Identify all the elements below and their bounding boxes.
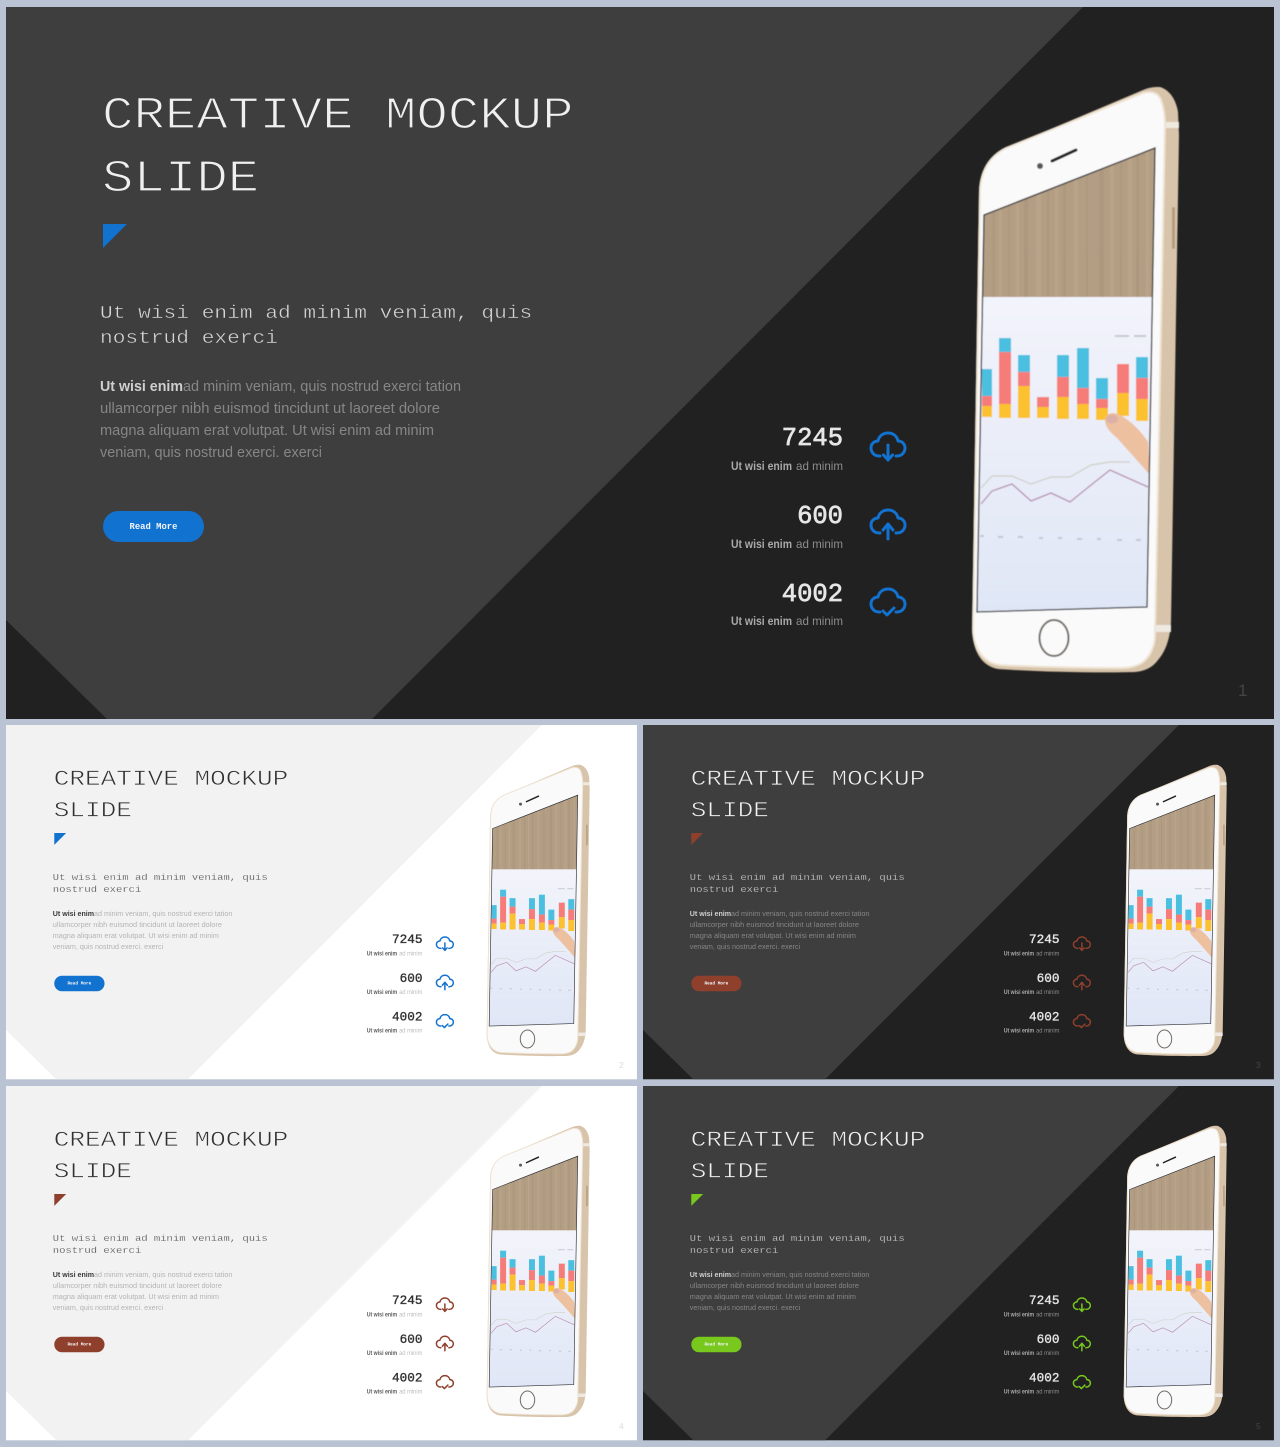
stat: 7245 xyxy=(1004,932,1060,957)
stat: 7245 xyxy=(731,424,843,473)
phone mockup xyxy=(970,87,1179,672)
title: SLIDE xyxy=(691,799,769,824)
icon: cloud check xyxy=(436,1376,453,1389)
panel: dark slide, green accent xyxy=(643,1086,1274,1440)
subheading xyxy=(53,1233,268,1256)
stat: 600 xyxy=(367,971,423,996)
body text xyxy=(53,909,232,951)
title xyxy=(102,90,574,205)
body text: veniam, quis nostrud exerci. exerci xyxy=(690,1303,801,1312)
stat: 7245: Ut wisi enim xyxy=(1004,951,1034,957)
body text: ad minim veniam, quis nostrud exerci tation xyxy=(94,1270,232,1279)
stat: 600: ad minim xyxy=(399,1351,423,1357)
body text xyxy=(690,909,869,951)
stat: 4002: 4002 xyxy=(392,1010,422,1025)
icon: cloud download xyxy=(436,1298,453,1311)
title: CREATIVE MOCKUP xyxy=(54,768,288,793)
stat: 600: 600 xyxy=(1037,1332,1059,1347)
page number: 2 xyxy=(619,1060,624,1070)
icon: cloud download xyxy=(871,433,905,460)
read more button xyxy=(691,1337,742,1352)
subheading: Ut wisi enim ad minim veniam, quis xyxy=(690,872,905,883)
stat: 600: Ut wisi enim xyxy=(1004,1351,1034,1357)
page number: 4 xyxy=(619,1421,624,1431)
title: SLIDE xyxy=(54,799,132,824)
stat: 4002: ad minim xyxy=(796,614,843,628)
stat: 7245 xyxy=(1004,1293,1060,1318)
icon: cloud upload xyxy=(436,975,453,990)
stat: 600: 600 xyxy=(400,971,422,986)
subheading: Ut wisi enim ad minim veniam, quis xyxy=(100,302,532,324)
stat: 4002: ad minim xyxy=(399,1029,423,1035)
panel: light slide, brown accent xyxy=(6,1086,637,1440)
stat: 4002: Ut wisi enim xyxy=(367,1029,397,1035)
title xyxy=(54,768,288,824)
body text: magna aliquam erat volutpat. Ut wisi enim ad minim xyxy=(690,1292,856,1301)
title: CREATIVE MOCKUP xyxy=(691,1129,925,1154)
stat: 7245 xyxy=(367,932,423,957)
stat: 4002: ad minim xyxy=(1036,1029,1060,1035)
body text: ullamcorper nibh euismod tincidunt ut laoreet dolore xyxy=(53,1281,222,1290)
panel: light slide, blue accent xyxy=(6,725,637,1079)
stat: 4002: 4002 xyxy=(1029,1010,1059,1025)
title xyxy=(691,768,925,824)
body text xyxy=(100,379,461,461)
panel: large dark slide, blue accent xyxy=(6,7,1274,719)
read more button xyxy=(54,1337,105,1352)
subheading: nostrud exerci xyxy=(53,885,141,895)
body text: ad minim veniam, quis nostrud exerci tation xyxy=(731,1270,869,1279)
subheading: Ut wisi enim ad minim veniam, quis xyxy=(53,872,268,883)
stat: 4002: Ut wisi enim xyxy=(367,1390,397,1396)
icon: cloud upload xyxy=(1073,975,1090,990)
panel: dark slide, brown accent xyxy=(643,725,1274,1079)
stat: 600 xyxy=(367,1332,423,1357)
body text xyxy=(690,1270,869,1312)
subheading: nostrud exerci xyxy=(690,885,778,895)
stat: 4002: ad minim xyxy=(1036,1390,1060,1396)
accent triangle xyxy=(54,1194,66,1206)
stat: 7245: 7245 xyxy=(392,932,422,947)
subheading: nostrud exerci xyxy=(100,327,278,349)
stat: 600: Ut wisi enim xyxy=(367,990,397,996)
stat: 4002: ad minim xyxy=(399,1390,423,1396)
stat: 7245: Ut wisi enim xyxy=(367,1312,397,1318)
phone mockup xyxy=(1123,765,1227,1056)
subheading xyxy=(53,872,268,895)
phone mockup xyxy=(1123,1126,1227,1417)
page number: 3 xyxy=(1256,1060,1261,1070)
stat: 600 xyxy=(731,502,843,551)
body text: veniam, quis nostrud exerci. exerci xyxy=(53,942,164,951)
stat: 7245: Ut wisi enim xyxy=(367,951,397,957)
stat: 600: 600 xyxy=(797,502,843,531)
subheading xyxy=(690,1233,905,1256)
stat: 7245: 7245 xyxy=(782,424,843,453)
stat: 4002 xyxy=(731,580,843,628)
stat: 7245: ad minim xyxy=(399,1312,423,1318)
stat: 600: Ut wisi enim xyxy=(367,1351,397,1357)
stat: 4002: Ut wisi enim xyxy=(1004,1029,1034,1035)
read more button xyxy=(691,976,742,991)
body text: Ut wisi enim xyxy=(53,1270,94,1279)
stat: 600: ad minim xyxy=(399,990,423,996)
stat: 4002: 4002 xyxy=(782,580,843,609)
stat: 7245: Ut wisi enim xyxy=(731,459,792,473)
body text: magna aliquam erat volutpat. Ut wisi enim ad minim xyxy=(53,931,219,940)
stat: 7245: ad minim xyxy=(1036,951,1060,957)
body text: magna aliquam erat volutpat. Ut wisi enim ad minim xyxy=(53,1292,219,1301)
body text: veniam, quis nostrud exerci. exerci xyxy=(690,942,801,951)
stat: 7245: 7245 xyxy=(392,1293,422,1308)
stat: 4002: Ut wisi enim xyxy=(731,614,792,628)
title: CREATIVE MOCKUP xyxy=(54,1129,288,1154)
accent triangle xyxy=(54,833,66,845)
stat: 600: 600 xyxy=(400,1332,422,1347)
stat: 600: ad minim xyxy=(1036,1351,1060,1357)
subheading xyxy=(100,302,532,349)
body text: ullamcorper nibh euismod tincidunt ut laoreet dolore xyxy=(690,920,859,929)
stat: 7245 xyxy=(367,1293,423,1318)
body text: Ut wisi enim xyxy=(690,1270,731,1279)
title xyxy=(691,1129,925,1185)
body text: Ut wisi enim xyxy=(100,379,183,395)
read more button: Read More xyxy=(130,522,177,532)
stat: 600: ad minim xyxy=(796,537,843,551)
stat: 4002: 4002 xyxy=(1029,1371,1059,1386)
stat: 600 xyxy=(1004,1332,1060,1357)
stat: 4002: 4002 xyxy=(392,1371,422,1386)
icon: cloud download xyxy=(436,937,453,950)
title: SLIDE xyxy=(102,153,259,205)
stat: 7245: Ut wisi enim xyxy=(1004,1312,1034,1318)
stat: 7245: 7245 xyxy=(1029,1293,1059,1308)
phone mockup xyxy=(486,1126,590,1417)
stat: 600: 600 xyxy=(1037,971,1059,986)
accent triangle xyxy=(691,1194,703,1206)
body text: veniam, quis nostrud exerci. exerci xyxy=(100,445,322,461)
icon: cloud check xyxy=(436,1015,453,1028)
icon: cloud upload xyxy=(871,510,905,539)
subheading: nostrud exerci xyxy=(53,1246,141,1256)
accent triangle xyxy=(103,224,127,248)
body text: ullamcorper nibh euismod tincidunt ut laoreet dolore xyxy=(100,401,440,417)
stat: 7245: ad minim xyxy=(796,459,843,473)
subheading: Ut wisi enim ad minim veniam, quis xyxy=(690,1233,905,1244)
body text: ullamcorper nibh euismod tincidunt ut laoreet dolore xyxy=(690,1281,859,1290)
stat: 600 xyxy=(1004,971,1060,996)
body text xyxy=(53,1270,232,1312)
body text: Ut wisi enim xyxy=(690,909,731,918)
stat: 7245: 7245 xyxy=(1029,932,1059,947)
title: SLIDE xyxy=(54,1160,132,1185)
stat: 4002 xyxy=(1004,1010,1060,1035)
body text: ad minim veniam, quis nostrud exerci tation xyxy=(183,379,461,395)
accent triangle xyxy=(691,833,703,845)
body text: ad minim veniam, quis nostrud exerci tation xyxy=(731,909,869,918)
phone mockup xyxy=(486,765,590,1056)
read more button: Read More xyxy=(67,1342,92,1348)
page number: 1 xyxy=(1238,681,1247,700)
icon: cloud upload xyxy=(1073,1336,1090,1351)
body text: ad minim veniam, quis nostrud exerci tation xyxy=(94,909,232,918)
read more button: Read More xyxy=(67,981,92,987)
body text: ullamcorper nibh euismod tincidunt ut laoreet dolore xyxy=(53,920,222,929)
icon: cloud check xyxy=(1073,1376,1090,1389)
subheading xyxy=(690,872,905,895)
body text: Ut wisi enim xyxy=(53,909,94,918)
stat: 600: ad minim xyxy=(1036,990,1060,996)
title: CREATIVE MOCKUP xyxy=(102,90,574,142)
read more button xyxy=(54,976,105,991)
page number: 5 xyxy=(1256,1421,1261,1431)
stat: 4002 xyxy=(367,1371,423,1396)
stat: 4002: Ut wisi enim xyxy=(1004,1390,1034,1396)
title: CREATIVE MOCKUP xyxy=(691,768,925,793)
icon: cloud check xyxy=(871,589,905,615)
subheading: Ut wisi enim ad minim veniam, quis xyxy=(53,1233,268,1244)
icon: cloud download xyxy=(1073,1298,1090,1311)
stat: 7245: ad minim xyxy=(399,951,423,957)
stat: 4002 xyxy=(1004,1371,1060,1396)
read more button: Read More xyxy=(704,1342,729,1348)
icon: cloud check xyxy=(1073,1015,1090,1028)
title xyxy=(54,1129,288,1185)
body text: magna aliquam erat volutpat. Ut wisi enim ad minim xyxy=(690,931,856,940)
subheading: nostrud exerci xyxy=(690,1246,778,1256)
icon: cloud upload xyxy=(436,1336,453,1351)
body text: veniam, quis nostrud exerci. exerci xyxy=(53,1303,164,1312)
stat: 4002 xyxy=(367,1010,423,1035)
body text: magna aliquam erat volutpat. Ut wisi enim ad minim xyxy=(100,423,434,439)
icon: cloud download xyxy=(1073,937,1090,950)
read more button xyxy=(103,511,204,542)
stat: 600: Ut wisi enim xyxy=(1004,990,1034,996)
stat: 600: Ut wisi enim xyxy=(731,537,792,551)
read more button: Read More xyxy=(704,981,729,987)
title: SLIDE xyxy=(691,1160,769,1185)
stat: 7245: ad minim xyxy=(1036,1312,1060,1318)
